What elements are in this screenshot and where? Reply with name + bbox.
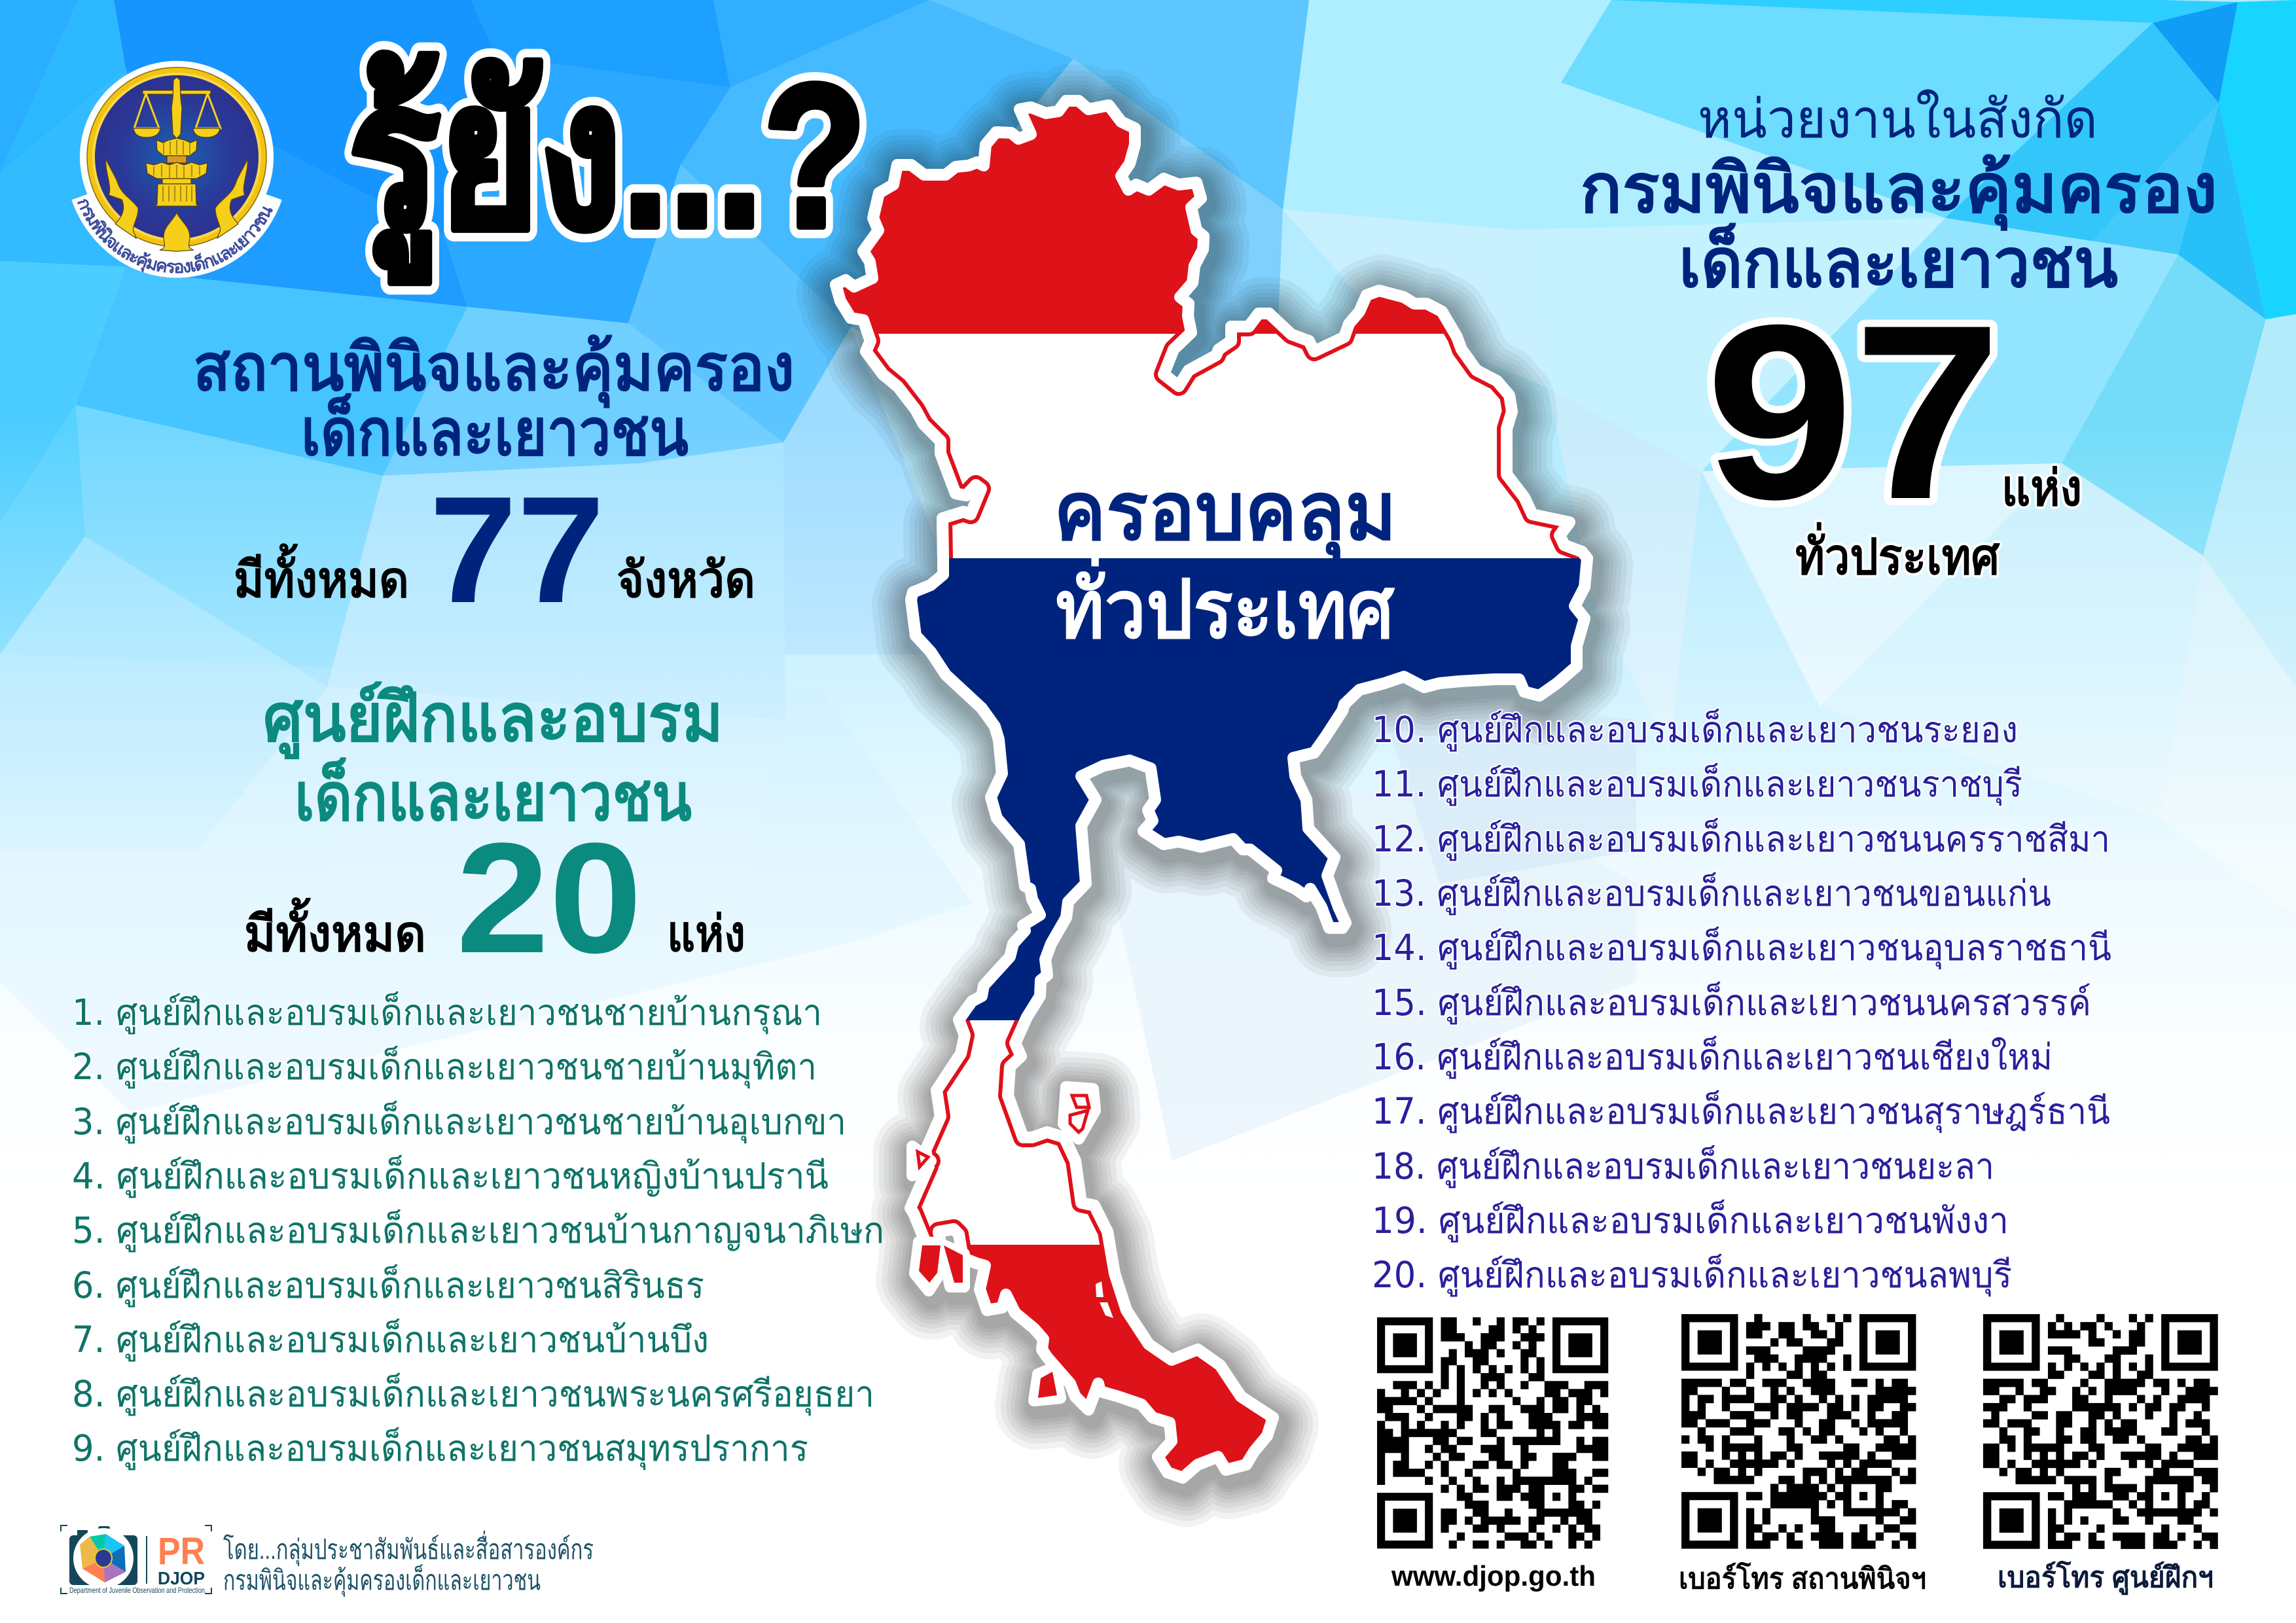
list: centers 1-9: 8. ศูนย์ฝึกและอบรมเด็กและเยาวชนพระนครศรีอยุธยา xyxy=(72,1373,874,1416)
stat: 97 units: แห่ง xyxy=(2001,461,2082,516)
heading: หน่วยงานในสังกัด กรมพินิจฯ: หน่วยงานในสังกัด xyxy=(1698,90,2098,149)
list: centers 10-20: 20. ศูนย์ฝึกและอบรมเด็กและเยาวชนลพบุรี xyxy=(1372,1254,2012,1297)
heading: ศูนย์ฝึกและอบรม xyxy=(263,681,723,834)
heading: สถานพินิจและคุ้มครอง: สถานพินิจและคุ้มครอง xyxy=(193,331,795,408)
emblem: lotus pedestal xyxy=(146,138,207,206)
list: centers 1-9: 7. ศูนย์ฝึกและอบรมเด็กและเยาวชนบ้านบึง xyxy=(72,1319,709,1362)
footer logo: PR DJOP: DJOP xyxy=(158,1568,205,1588)
stat: 20 centers: แห่ง xyxy=(667,906,745,962)
logo: DJOP emblem xyxy=(71,61,282,277)
QR code: website xyxy=(1377,1321,1608,1544)
emblem: nagas xyxy=(106,159,247,238)
heading: ศูนย์ฝึกและอบรม: ศูนย์ฝึกและอบรม xyxy=(263,681,723,760)
title: รู้ยัง...?: รู้ยัง...? xyxy=(349,43,867,284)
map: Thailand with flag bands xyxy=(785,65,1636,1507)
QR captions: www.djop.go.th xyxy=(1391,1560,1596,1592)
stat: 97 units: ทั่วประเทศ xyxy=(1795,522,2001,585)
list: centers 1-9: 3. ศูนย์ฝึกและอบรมเด็กและเยาวชนชายบ้านอุเบกขา xyxy=(72,1101,846,1144)
list: centers 1-9: 4. ศูนย์ฝึกและอบรมเด็กและเยาวชนหญิงบ้านปรานี xyxy=(72,1155,829,1198)
islands: Andaman xyxy=(919,1245,1057,1398)
heading: ศูนย์ฝึกและอบรม: เด็กและเยาวชน xyxy=(295,757,692,834)
emblem: scales xyxy=(134,77,221,139)
stat: 77 provinces: 77 xyxy=(429,465,605,635)
map label: ครอบคลุม ทั่วประเทศ xyxy=(1054,467,1397,655)
list: centers 10-20: 16. ศูนย์ฝึกและอบรมเด็กและเยาวชนเชียงใหม่ xyxy=(1372,1036,2053,1079)
title: รู้ยัง...?: รู้ยัง...? xyxy=(349,43,867,284)
footer logo: PR DJOP xyxy=(61,1525,211,1595)
list: centers 1-9: 5. ศูนย์ฝึกและอบรมเด็กและเยาวชนบ้านกาญจนาภิเษก xyxy=(72,1209,884,1253)
list: centers 10-20: 14. ศูนย์ฝึกและอบรมเด็กและเยาวชนอุบลราชธานี xyxy=(1372,927,2111,970)
footer credit text: กรมพินิจและคุ้มครองเด็กและเยาวชน xyxy=(223,1564,541,1597)
heading: หน่วยงานในสังกัด กรมพินิจฯ: เด็กและเยาวชน xyxy=(1679,222,2118,302)
heading: สถานพินิจและคุ้มครอง: เด็กและเยาวชน xyxy=(301,393,689,469)
stat: 20 centers: 20 xyxy=(456,810,642,986)
QR captions xyxy=(1391,1560,2214,1595)
list: centers 10-20: 19. ศูนย์ฝึกและอบรมเด็กและเยาวชนพังงา xyxy=(1372,1200,2009,1243)
list: centers 10-20: 15. ศูนย์ฝึกและอบรมเด็กและเยาวชนนครสวรรค์ xyxy=(1372,982,2091,1025)
map shadow xyxy=(839,107,1590,1484)
list: centers 10-20: 10. ศูนย์ฝึกและอบรมเด็กและเยาวชนระยอง xyxy=(1372,709,2018,752)
list: centers 10-20: 12. ศูนย์ฝึกและอบรมเด็กและเยาวชนนครราชสีมา xyxy=(1372,818,2110,861)
list: centers 10-20: 11. ศูนย์ฝึกและอบรมเด็กและเยาวชนราชบุรี xyxy=(1372,763,2022,806)
footer logo: PR DJOP: Department of Juvenile Observation and Protection xyxy=(69,1586,205,1595)
list: centers 10-20: 18. ศูนย์ฝึกและอบรมเด็กและเยาวชนยะลา xyxy=(1372,1145,1994,1188)
stat: 77 provinces: มีทั้งหมด xyxy=(234,543,409,608)
map label: ครอบคลุม ทั่วประเทศ: ครอบคลุม xyxy=(1054,467,1397,562)
footer credit text: โดย...กลุ่มประชาสัมพันธ์และสื่อสารองค์กร xyxy=(223,1531,594,1567)
heading: สถานพินิจและคุ้มครอง xyxy=(193,331,795,469)
stat: 77 provinces xyxy=(234,465,755,635)
heading: หน่วยงานในสังกัด กรมพินิจฯ: กรมพินิจและคุ้มครอง xyxy=(1580,151,2217,231)
heading: หน่วยงานในสังกัด กรมพินิจฯ xyxy=(1580,90,2217,302)
footer credit text xyxy=(223,1531,594,1597)
list: centers 1-9: 2. ศูนย์ฝึกและอบรมเด็กและเยาวชนชายบ้านมุทิตา xyxy=(72,1046,817,1089)
list: centers 1-9: 6. ศูนย์ฝึกและอบรมเด็กและเยาวชนสิรินธร xyxy=(72,1264,704,1308)
QR captions: เบอร์โทร ศูนย์ฝึกฯ xyxy=(1998,1560,2214,1595)
stat: 97 units: 97 xyxy=(1706,273,2001,551)
stat: 20 centers xyxy=(244,810,745,986)
stat: 20 centers: มีทั้งหมด xyxy=(244,897,426,962)
QR code: observation centres phone xyxy=(1681,1318,1916,1544)
emblem: bottom lotus xyxy=(160,213,194,251)
footer logo: PR DJOP: PR xyxy=(158,1530,205,1573)
QR code: training centres phone xyxy=(1983,1318,2218,1545)
island: Samui red lines xyxy=(1070,1096,1089,1132)
island: Samui outline xyxy=(1064,1087,1095,1139)
QR captions: เบอร์โทร สถานพินิจฯ xyxy=(1679,1561,1926,1595)
list: centers 1-9: 9. ศูนย์ฝึกและอบรมเด็กและเยาวชนสมุทรปราการ xyxy=(72,1427,808,1471)
list: centers 1-9: 1. ศูนย์ฝึกและอบรมเด็กและเยาวชนชายบ้านกรุณา xyxy=(72,991,822,1035)
map label: ครอบคลุม ทั่วประเทศ: ทั่วประเทศ xyxy=(1056,552,1395,655)
list: centers 10-20: 13. ศูนย์ฝึกและอบรมเด็กและเยาวชนขอนแก่น xyxy=(1372,872,2051,916)
stat: 97 units xyxy=(1706,273,2082,585)
list: centers 1-9 xyxy=(72,991,884,1471)
list: centers 10-20 xyxy=(1372,709,2111,1297)
stat: 77 provinces: จังหวัด xyxy=(617,552,755,608)
island: Phra Thong outline xyxy=(918,1152,928,1167)
list: centers 10-20: 17. ศูนย์ฝึกและอบรมเด็กและเยาวชนสุราษฎร์ธานี xyxy=(1372,1090,2110,1133)
emblem: ribbon text: กรมพินิจและคุ้มครองเด็กและเยาวชน xyxy=(77,199,273,274)
